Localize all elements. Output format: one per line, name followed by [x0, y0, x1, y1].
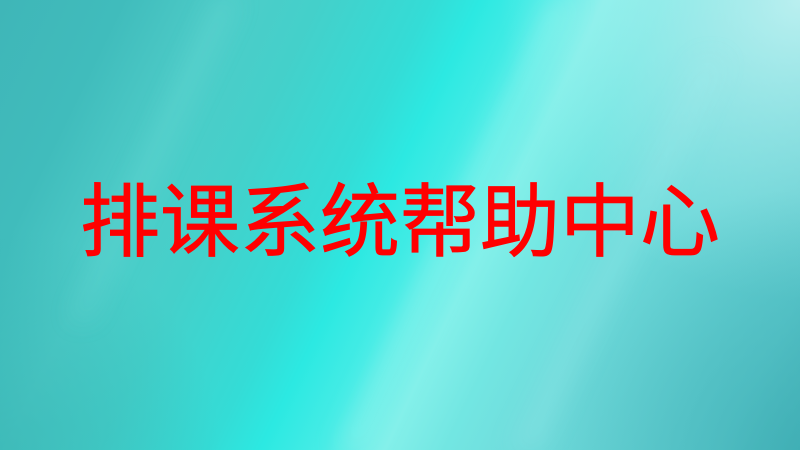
- title: 排课系统帮助中心: [80, 178, 720, 267]
